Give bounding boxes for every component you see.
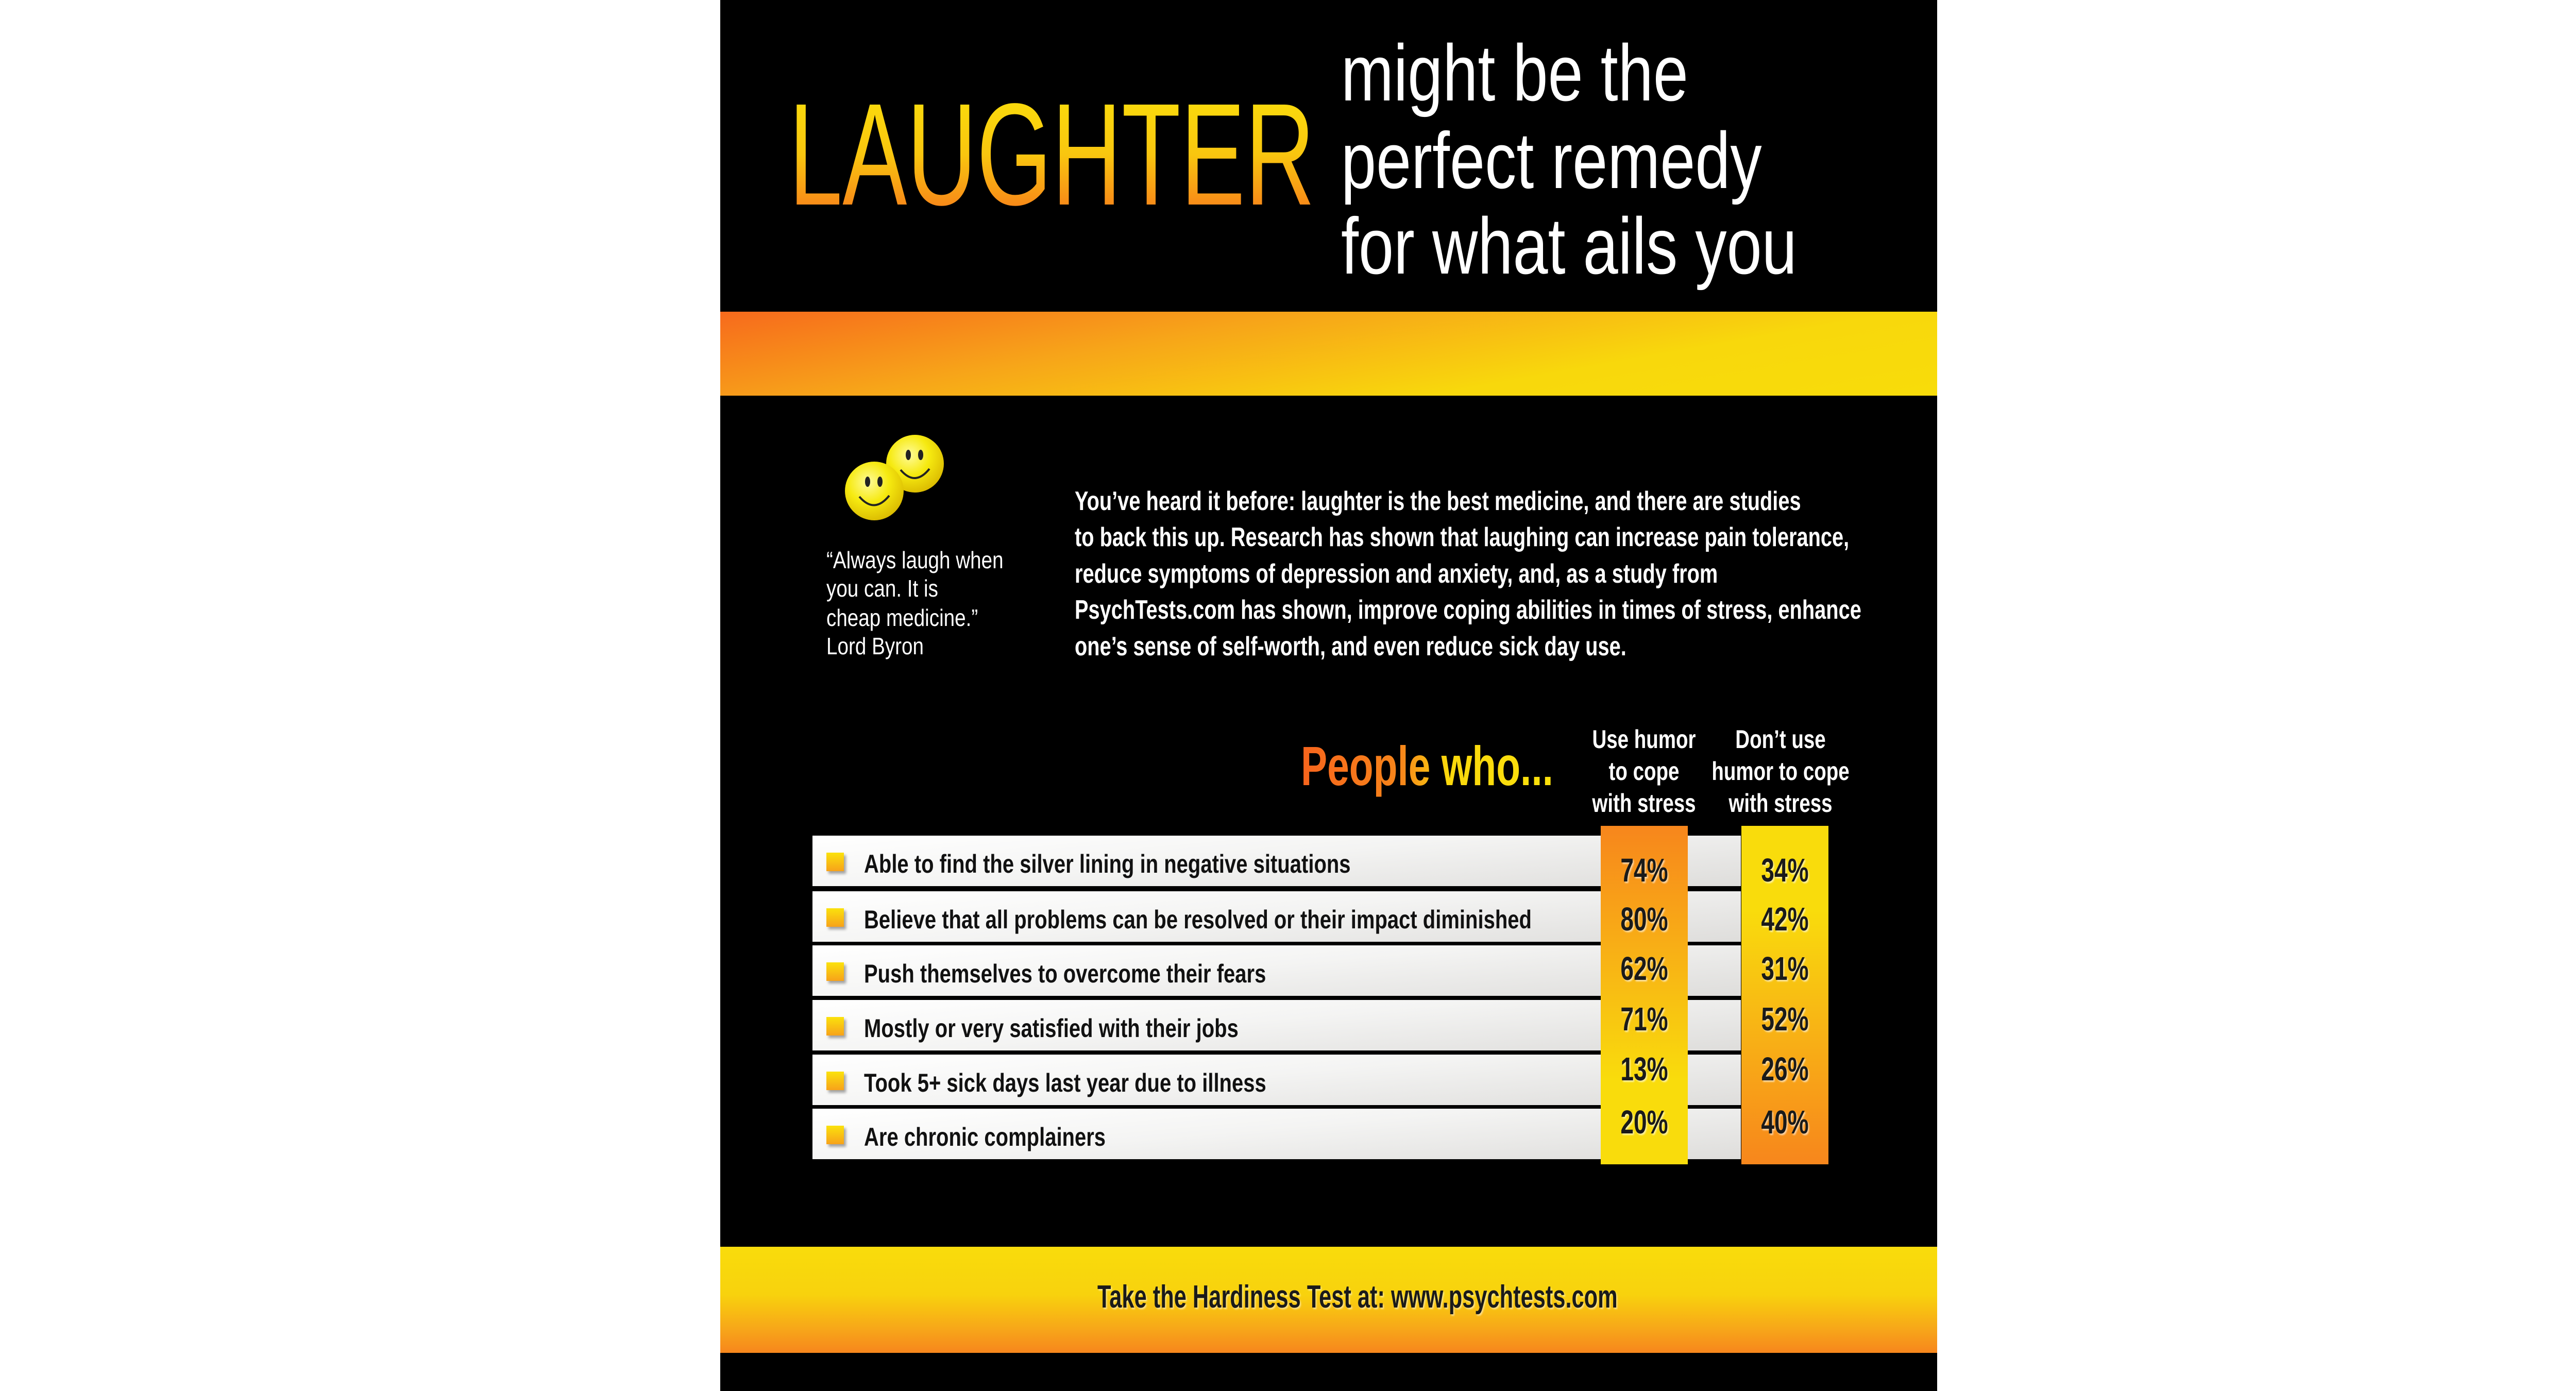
row 5 [812, 1055, 1741, 1105]
row 5: Took 5+ sick days last year due to illness [864, 1068, 1266, 1097]
column: don't use humor values [1741, 826, 1828, 1164]
quote: you can. It is [826, 575, 938, 602]
column: don't use humor values: 26% [1761, 1050, 1809, 1088]
table rows [812, 836, 1741, 1159]
quote: cheap medicine.” [826, 604, 978, 631]
column: don't use humor values: 34% [1761, 852, 1809, 889]
row 2: Believe that all problems can be resolved or their impact diminished [864, 905, 1532, 934]
column: use humor values: 62% [1620, 950, 1668, 987]
row 6 [812, 1109, 1741, 1159]
intro paragraph: You’ve heard it before: laughter is the best medicine, and there are studies [1075, 486, 1801, 516]
row 3: Push themselves to overcome their fears [864, 959, 1266, 988]
intro paragraph [1075, 486, 1861, 661]
column header: don't use humor: humor to cope [1711, 757, 1850, 786]
quote [826, 547, 1004, 659]
intro paragraph: PsychTests.com has shown, improve coping abilities in times of stress, enhance [1075, 595, 1861, 625]
quote: Lord Byron [826, 633, 924, 659]
row 4 [812, 1000, 1741, 1050]
column: don't use humor values: 52% [1761, 1000, 1809, 1038]
title: LAUGHTER: LAUGHTER [789, 73, 1315, 235]
column: use humor values: 13% [1620, 1050, 1668, 1088]
footer band [720, 1247, 1937, 1353]
intro paragraph: to back this up. Research has shown that laughing can increase pain tolerance, [1075, 522, 1849, 552]
column header: don't use humor: Don’t use [1735, 725, 1826, 754]
column: use humor values: 20% [1620, 1104, 1668, 1141]
intro paragraph: one’s sense of self-worth, and even reduce sick day use. [1075, 632, 1626, 661]
subtitle [1341, 28, 1797, 291]
column header: don't use humor [1711, 725, 1850, 818]
column: use humor values: 74% [1620, 852, 1668, 889]
background panel [720, 0, 1937, 1391]
heading: People who...: People who... [1301, 735, 1553, 797]
quote: “Always laugh when [826, 547, 1004, 573]
column header: use humor: with stress [1592, 789, 1696, 818]
column header: don't use humor: with stress [1728, 789, 1833, 818]
column: don't use humor values: 42% [1761, 901, 1809, 938]
column: use humor values [1601, 826, 1688, 1164]
subtitle: perfect remedy [1341, 116, 1762, 205]
column header: use humor: Use humor [1592, 725, 1696, 754]
column header: use humor: to cope [1609, 757, 1679, 786]
row 3 [812, 945, 1741, 996]
orange gradient band [720, 312, 1937, 396]
column header: use humor [1592, 725, 1696, 818]
footer call to action: Take the Hardiness Test at: www.psychtests.com [1097, 1279, 1618, 1315]
icon: smiley faces [845, 435, 944, 520]
row 2 [812, 891, 1741, 942]
column: don't use humor values: 40% [1761, 1104, 1809, 1141]
column: don't use humor values: 31% [1761, 950, 1809, 987]
row 1 [812, 836, 1741, 886]
row 1: Able to find the silver lining in negative situations [864, 850, 1351, 878]
row 6: Are chronic complainers [864, 1123, 1106, 1151]
subtitle: might be the [1341, 28, 1688, 117]
column: use humor values: 71% [1620, 1000, 1668, 1038]
row 4: Mostly or very satisfied with their jobs [864, 1014, 1239, 1043]
column: use humor values: 80% [1620, 901, 1668, 938]
intro paragraph: reduce symptoms of depression and anxiety, and, as a study from [1075, 559, 1718, 589]
subtitle: for what ails you [1341, 201, 1797, 291]
